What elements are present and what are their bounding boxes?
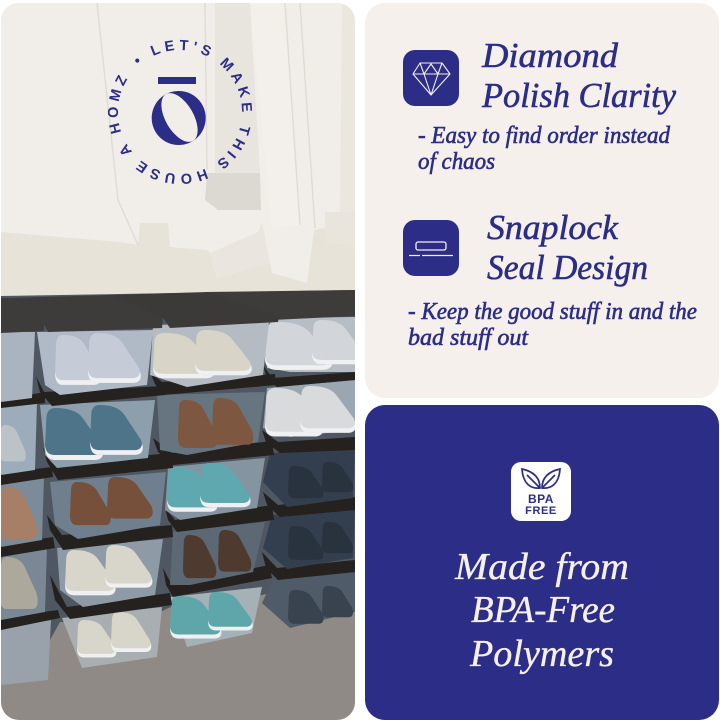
heading: made from BPA-free polymers: BPA-Free xyxy=(471,589,615,631)
icon: BPA free badge: BPA xyxy=(528,492,554,506)
shoe boxes xyxy=(0,290,363,685)
text: diamond description: of chaos xyxy=(418,149,495,175)
heading: snaplock seal design xyxy=(487,208,648,287)
text: snaplock description: - Keep the good stuff in and the xyxy=(408,299,697,325)
text: diamond description: - Easy to find order instead xyxy=(418,123,671,149)
icon: BPA free badge xyxy=(511,462,571,521)
icon: diamond xyxy=(403,50,459,106)
circular slogan: • LET'S MAKE THIS HOUSE A HOMZ xyxy=(108,40,252,184)
heading: diamond polish clarity xyxy=(481,36,676,115)
panel: product photo xyxy=(0,3,363,720)
heading: diamond polish clarity: Polish Clarity xyxy=(481,76,676,115)
panel: BPA free xyxy=(365,405,719,720)
logo mark xyxy=(152,77,206,148)
stack backdrop xyxy=(1,290,355,640)
icon: snaplock seal xyxy=(403,220,459,276)
heading: made from BPA-free polymers xyxy=(454,546,629,675)
A column xyxy=(1,620,51,685)
text: snaplock description xyxy=(408,299,697,351)
B column xyxy=(62,607,162,668)
C column xyxy=(170,587,262,647)
heading: diamond polish clarity: Diamond xyxy=(481,36,619,75)
D column xyxy=(262,573,355,628)
icon: BPA free badge: FREE xyxy=(525,505,557,517)
heading: snaplock seal design: Seal Design xyxy=(487,248,648,287)
panel: features xyxy=(365,3,719,398)
logo badge xyxy=(108,40,252,184)
carpet xyxy=(1,594,355,720)
heading: made from BPA-free polymers: Polymers xyxy=(469,633,614,675)
heading: snaplock seal design: Snaplock xyxy=(487,208,619,247)
text: snaplock description: bad stuff out xyxy=(408,325,529,351)
heading: made from BPA-free polymers: Made from xyxy=(454,546,629,588)
text: diamond description xyxy=(418,123,671,175)
shirts xyxy=(1,3,355,283)
